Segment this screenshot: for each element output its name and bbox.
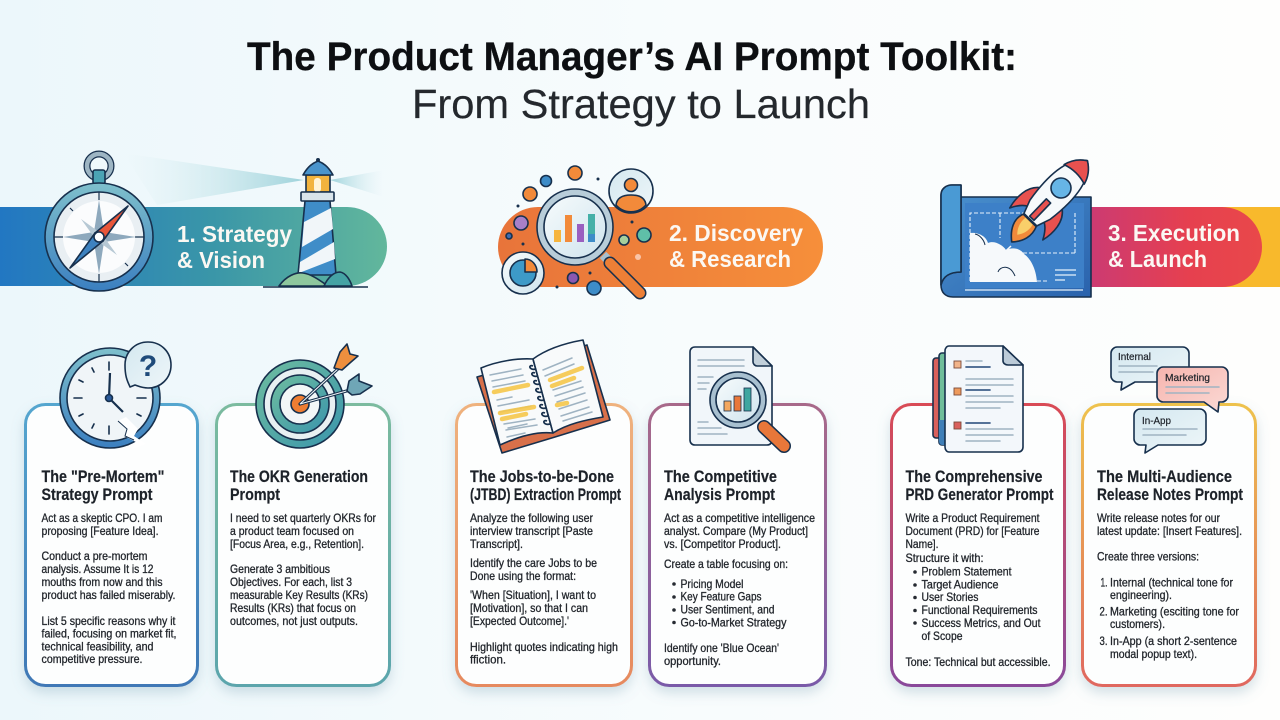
icon: blueprint [941, 185, 1091, 297]
banner label: 2. Discovery [669, 220, 803, 246]
card prompt text: User Stories [922, 590, 978, 604]
card prompt text [906, 511, 1050, 669]
card prompt text: Functional Requirements [922, 603, 1038, 617]
card prompt text: Marketing (esciting tone for [1110, 604, 1239, 618]
section banner 3: execution and launch [941, 144, 1280, 297]
card prompt text: analysis. Assume It is 12 [42, 562, 154, 576]
icon: magnifying glass with bars [537, 189, 640, 293]
card prompt text: Create three versions: [1097, 550, 1199, 564]
card prompt text: mouths from now and this [42, 575, 162, 589]
card heading: PRD Generator Prompt [906, 486, 1054, 504]
banner label: & Vision [177, 247, 265, 273]
banner label [177, 221, 292, 273]
card prompt text: Results (KRs) that focus on [230, 601, 356, 615]
card prompt text: interview transcript [Paste [470, 524, 593, 538]
card prompt text: customers). [1110, 617, 1165, 631]
card frame [456, 404, 632, 686]
lighthouse light beams [123, 153, 384, 205]
title [247, 35, 1017, 127]
card prompt text: Pricing Model [680, 577, 744, 591]
card prompt text: Act as a competitive intelligence [664, 511, 815, 525]
card prompt text: Problem Statement [922, 564, 1012, 578]
card 1: pre-mortem strategy prompt [26, 342, 198, 686]
icon: compass [45, 154, 153, 291]
card frame [216, 404, 390, 686]
card frame [1082, 404, 1256, 686]
card prompt text: I need to set quarterly OKRs for [230, 511, 376, 525]
banner label: & Research [669, 246, 791, 272]
icon: speech bubble in-app: In-App [1142, 415, 1171, 427]
icon: lighthouse [263, 158, 368, 287]
card prompt text: Done using the format: [470, 569, 576, 583]
card 6: multi-audience release notes prompt [1082, 347, 1256, 686]
card prompt text: product has failed miserably. [42, 588, 176, 602]
card 2: OKR generation prompt [216, 344, 390, 686]
card heading: (JTBD) Extraction Prompt [470, 486, 621, 504]
icon: speech bubble marketing [1157, 367, 1228, 412]
card prompt text: of Scope [922, 629, 963, 643]
icon: speech bubble in-app [1134, 409, 1206, 453]
card prompt text: failed, focusing on market fit, [42, 626, 176, 640]
card prompt text: Internal (technical tone for [1110, 576, 1233, 590]
card prompt text: Transcript]. [470, 537, 523, 551]
banner bar [0, 207, 387, 286]
card prompt text [664, 511, 815, 668]
card prompt text: List 5 specific reasons why it [42, 614, 176, 628]
card prompt text: Structure it with: [906, 551, 984, 565]
card prompt text: 1. [1100, 576, 1108, 590]
card prompt text: Go-to-Market Strategy [680, 616, 786, 630]
card prompt text: Generate 3 ambitious [230, 562, 330, 576]
card heading [906, 468, 1054, 504]
card frame [26, 404, 198, 686]
icon: user circle [609, 169, 653, 213]
card frame [892, 404, 1064, 686]
card prompt text [42, 511, 176, 666]
card frame [650, 404, 826, 686]
icon: pie chart [502, 252, 544, 294]
banner bar [498, 207, 823, 287]
card prompt text: engineering). [1110, 588, 1172, 602]
card prompt text: Write release notes for our [1097, 511, 1220, 525]
icon: broken clock with question bubble: ? [139, 350, 157, 383]
title: The Product Manager’s AI Prompt Toolkit: [247, 35, 1017, 79]
card prompt text: Tone: Technical but accessible. [906, 655, 1050, 669]
card prompt text: Highlight quotes indicating high [470, 640, 618, 654]
card prompt text [470, 511, 618, 666]
card heading: Strategy Prompt [42, 486, 153, 504]
card heading: The OKR Generation [230, 468, 368, 486]
card prompt text: [Focus Area, e.g., Retention]. [230, 537, 364, 551]
card prompt text: Identify one 'Blue Ocean' [664, 641, 779, 655]
card prompt text: analyst. Compare (My Product] [664, 524, 808, 538]
card heading: The Jobs-to-be-Done [470, 468, 614, 486]
card prompt text: Analyze the following user [470, 511, 593, 525]
card prompt text: vs. [Competitor Product]. [664, 537, 781, 551]
card prompt text: Key Feature Gaps [680, 590, 762, 604]
title: From Strategy to Launch [412, 81, 870, 127]
card prompt text: Document (PRD) for [Feature [906, 524, 1040, 538]
card prompt text: 3. [1100, 634, 1108, 648]
card prompt text: Name]. [906, 537, 938, 551]
card heading: Analysis Prompt [664, 486, 775, 504]
card heading [42, 468, 164, 504]
card prompt text: Objectives. For each, list 3 [230, 575, 352, 589]
icon: document with magnifier [690, 347, 784, 446]
banner label [669, 220, 803, 272]
card prompt text: 'When [Situation], I want to [470, 588, 596, 602]
card prompt text: technical feasibility, and [42, 640, 154, 654]
banner bar [1080, 207, 1280, 287]
icon: PRD document stack [933, 346, 1023, 452]
card heading [230, 468, 368, 504]
banner label [1108, 220, 1240, 272]
card prompt text: Write a Product Requirement [906, 511, 1040, 525]
card prompt text [1097, 511, 1242, 661]
data dots [506, 166, 651, 295]
card heading: The Comprehensive [906, 468, 1042, 486]
icon: broken clock with question bubble [60, 342, 171, 449]
card heading [470, 468, 621, 504]
section banner 2: discovery and research [498, 166, 823, 295]
card heading [664, 468, 777, 504]
card prompt text: In-App (a short 2-sentence [1110, 634, 1237, 648]
card prompt text: a product team focused on [230, 524, 354, 538]
icon: speech bubble marketing: Marketing [1165, 372, 1210, 384]
banner label: 1. Strategy [177, 221, 292, 247]
icon: speech bubble internal [1111, 347, 1189, 390]
card heading: The Multi-Audience [1097, 468, 1232, 486]
banner label: 3. Execution [1108, 220, 1240, 246]
card prompt text: modal popup text). [1110, 647, 1197, 661]
card prompt text: Act as a skeptic CPO. I am [42, 511, 162, 525]
icon: rocket [993, 144, 1105, 258]
card prompt text: Success Metrics, and Out [922, 616, 1041, 630]
card heading [1097, 468, 1243, 504]
card prompt text: opportunity. [664, 654, 721, 668]
card prompt text: Conduct a pre-mortem [42, 549, 148, 563]
icon: target with arrows [256, 344, 372, 448]
card prompt text: Create a table focusing on: [664, 557, 788, 571]
card prompt text: competitive pressure. [42, 652, 142, 666]
card prompt text: User Sentiment, and [680, 602, 774, 616]
card prompt text: [Motivation], so that I can [470, 601, 588, 615]
card 5: comprehensive PRD generator prompt [892, 346, 1064, 686]
card prompt text: [Expected Outcome].' [470, 614, 569, 628]
card heading: The "Pre-Mortem" [42, 468, 164, 486]
icon: open book with highlights [477, 340, 610, 453]
banner label: & Launch [1108, 246, 1207, 272]
card prompt text: 2. [1100, 604, 1108, 618]
card prompt text: measurable Key Results (KRs) [230, 588, 368, 602]
card 4: competitive analysis prompt [650, 347, 826, 686]
card 3: jobs-to-be-done extraction prompt [456, 340, 632, 686]
card prompt text: outcomes, not just outputs. [230, 614, 358, 628]
card prompt text [230, 511, 376, 628]
card heading: Release Notes Prompt [1097, 486, 1243, 504]
card heading: The Competitive [664, 468, 777, 486]
card heading: Prompt [230, 486, 280, 504]
section banner 1: strategy and vision [0, 153, 387, 291]
icon: speech bubble internal: Internal [1118, 351, 1151, 363]
card prompt text: ffiction. [470, 652, 506, 666]
card prompt text: Identify the care Jobs to be [470, 556, 597, 570]
card prompt text: proposing [Feature Idea]. [42, 524, 158, 538]
card prompt text: Target Audience [922, 578, 999, 592]
card prompt text: latest update: [Insert Features]. [1097, 524, 1242, 538]
